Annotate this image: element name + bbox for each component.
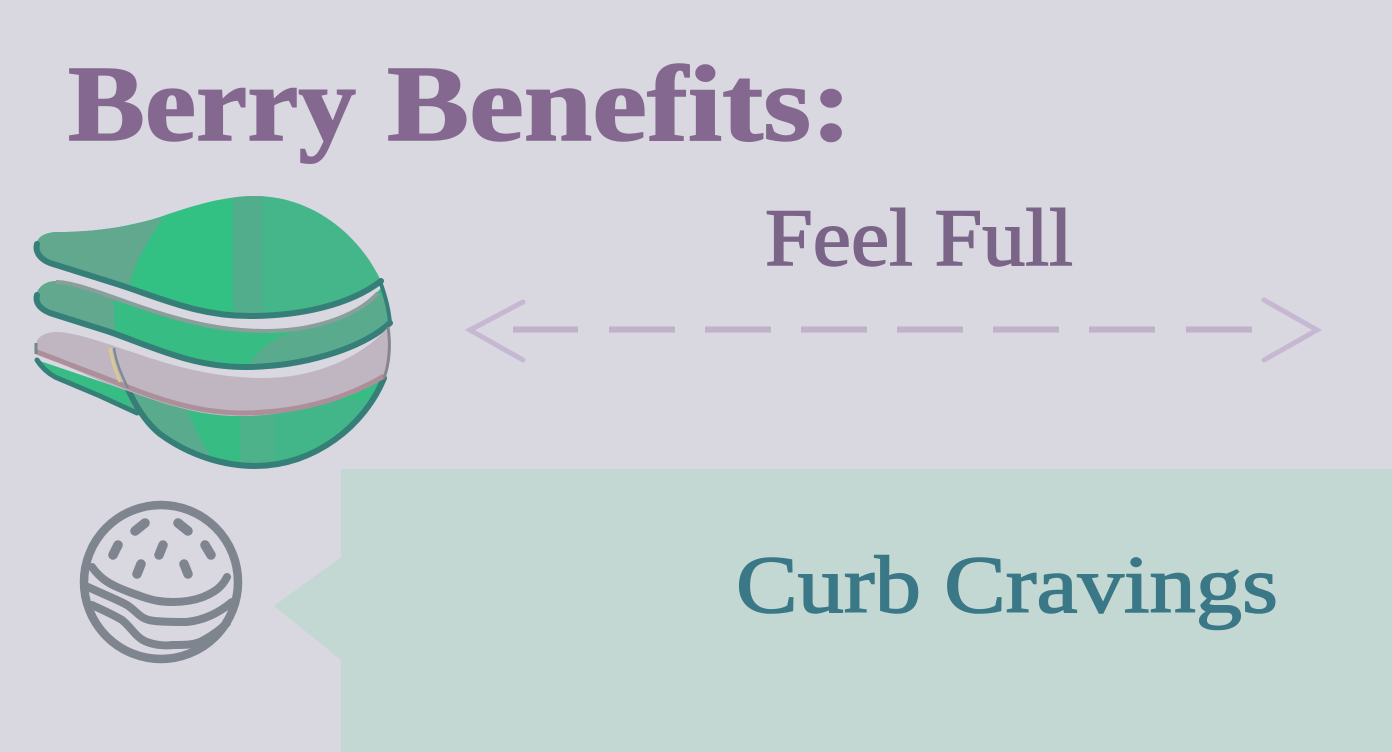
heading: Curb Cravings: Curb Cravings [736,539,1278,630]
berry grey band [36,327,389,416]
arrow: double-headed dashed [470,300,1317,360]
heading: Feel Full: Feel Full [765,192,1073,283]
berry middle band [30,275,395,370]
berry lower green lobe [37,360,400,470]
title: Berry [68,45,356,164]
icon: green berry with stripes [30,190,400,470]
icon: burger-like berry outline [84,505,238,659]
berry top lobe [30,190,381,320]
title [68,45,852,164]
panel: curb cravings callout [274,469,1392,752]
title: Benefits: [387,45,852,164]
